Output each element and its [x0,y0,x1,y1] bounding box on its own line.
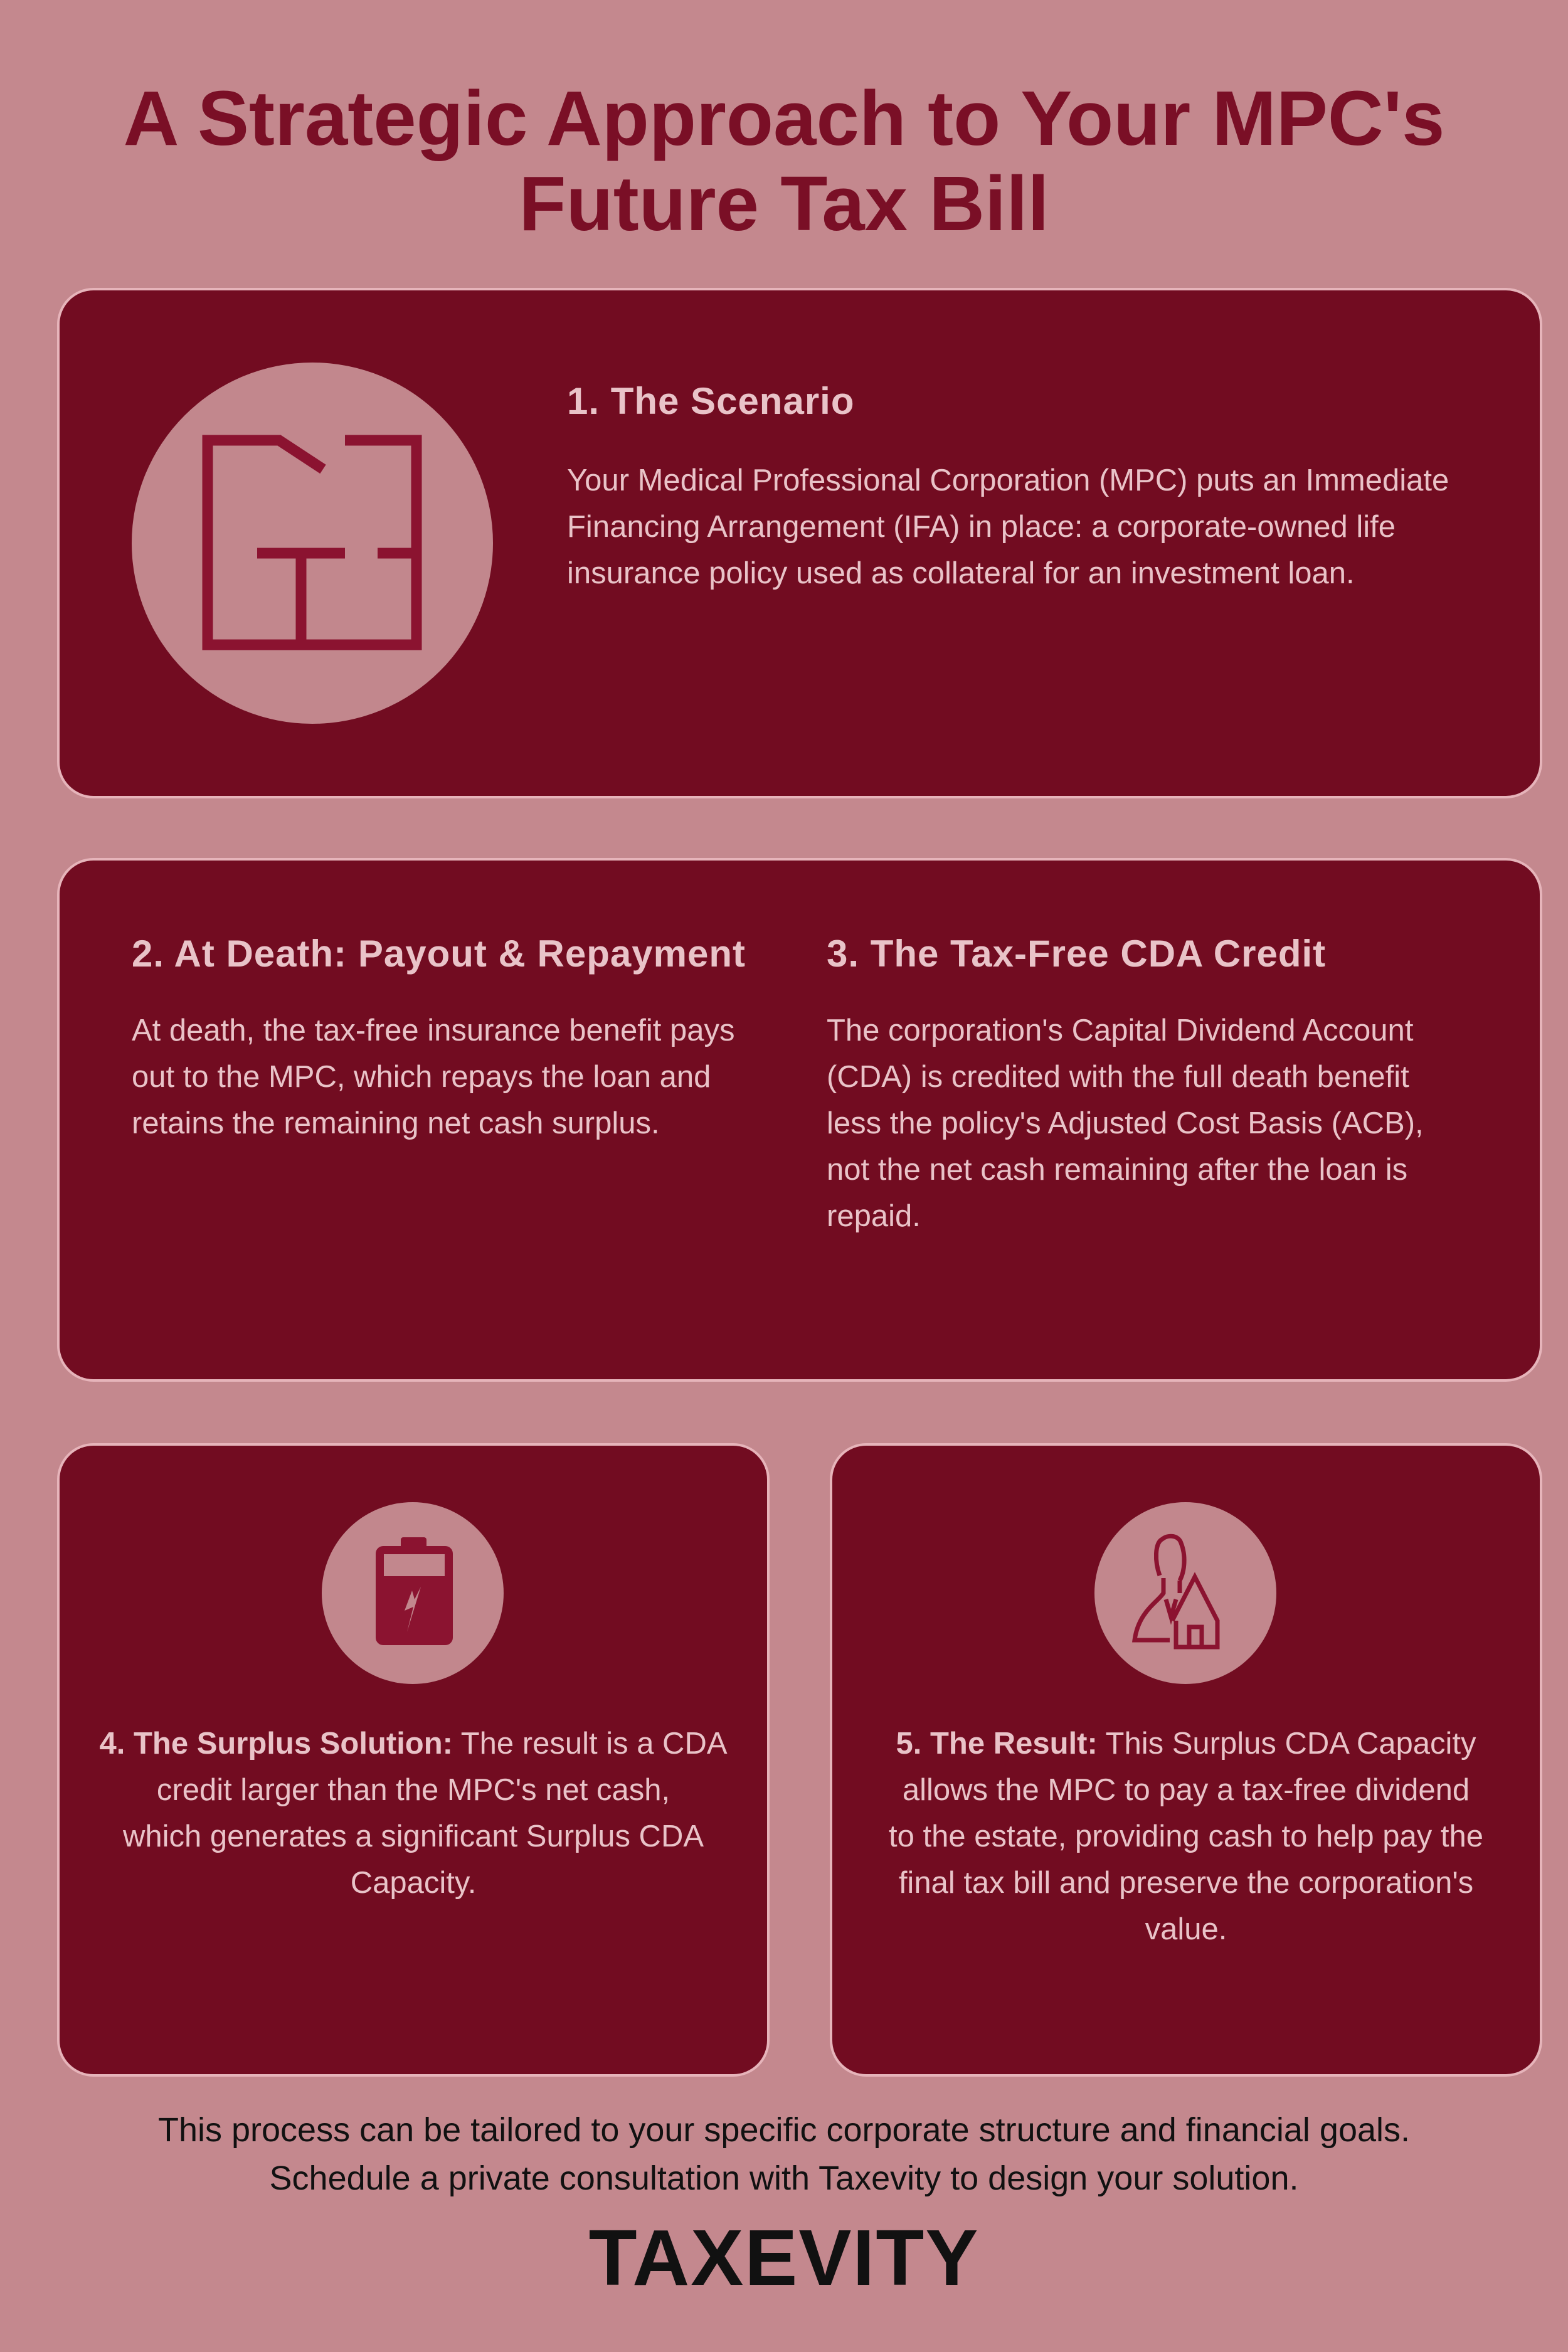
title: A Strategic Approach to Your MPC's [124,76,1444,162]
text: result body: final tax bill and preserve the corporation's [899,1866,1473,1900]
text: result body: to the estate, providing cash to help pay the [889,1820,1483,1853]
text: payout body: retains the remaining net cash surplus. [132,1106,660,1140]
text: result body: 5. The Result: This Surplus CDA Capacity [896,1727,1476,1761]
text: result body: value. [1145,1912,1227,1946]
icon: battery [322,1502,504,1684]
text: surplus body: Capacity. [351,1866,476,1900]
text: CDA body: The corporation's Capital Dividend Account [827,1014,1413,1047]
text: result body [889,1727,1483,1946]
text: CDA body: (CDA) is credited with the full death benefit [827,1060,1409,1094]
text: scenario body [567,464,1449,590]
text: CDA body: repaid. [827,1199,921,1233]
footer text: This process can be tailored to your specific corporate structure and financial goals. [158,2111,1410,2149]
text: CDA body: not the net cash remaining after the loan is [827,1153,1407,1187]
text: payout body [132,1014,735,1140]
text: payout body: At death, the tax-free insurance benefit pays [132,1014,735,1047]
title: Future Tax Bill [519,161,1049,247]
heading: 1. The Scenario: 1. The Scenario [567,380,854,422]
title [124,76,1444,247]
text: CDA body: less the policy's Adjusted Cost Basis (ACB), [827,1106,1424,1140]
text: scenario body: Your Medical Professional Corporation (MPC) puts an Immediate [567,464,1449,497]
panel: death payout and CDA [57,858,1542,1382]
text: surplus body: which generates a significant Surplus CDA [123,1820,704,1853]
heading: 3. CDA Credit: 3. The Tax-Free CDA Credit [827,933,1326,975]
heading: 2. At Death: 2. At Death: Payout & Repayment [132,933,746,975]
panel: result [830,1443,1542,2077]
text: CDA body [827,1014,1424,1233]
text: scenario body: insurance policy used as collateral for an investment loan. [567,556,1355,590]
icon: person with house [1094,1502,1276,1684]
icon: floor plan [132,363,493,724]
text: payout body: out to the MPC, which repays the loan and [132,1060,711,1094]
text: scenario body: Financing Arrangement (IFA) in place: a corporate-owned life [567,510,1396,544]
text: surplus body: 4. The Surplus Solution: The result is a CDA [99,1727,728,1761]
panel: scenario [57,288,1542,798]
text: surplus body [99,1727,728,1900]
footer text [158,2111,1410,2197]
text: surplus body: credit larger than the MPC's net cash, [157,1773,670,1807]
logo: TAXEVITY: TAXEVITY [589,2213,979,2302]
text: result body: allows the MPC to pay a tax-free dividend [903,1773,1470,1807]
panel: surplus solution [57,1443,770,2077]
footer text: Schedule a private consultation with Taxevity to design your solution. [270,2159,1298,2197]
